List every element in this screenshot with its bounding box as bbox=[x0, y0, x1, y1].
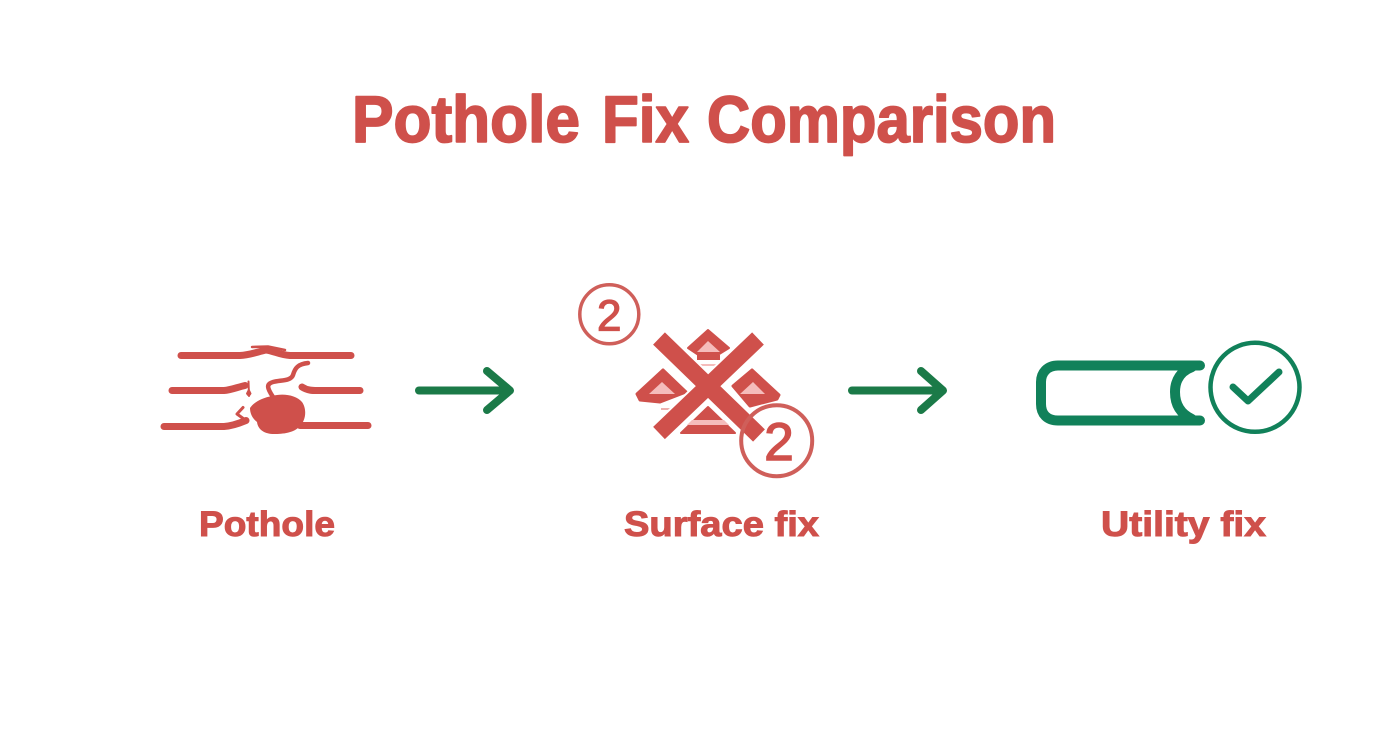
right diamond bbox=[733, 370, 779, 406]
badge: number 2 upper left bbox=[580, 285, 639, 344]
left diamond bbox=[637, 370, 686, 402]
title: Fix bbox=[602, 82, 689, 156]
arrow: surface fix to utility fix bbox=[852, 371, 943, 410]
label: utility fix: Utility fix bbox=[1101, 505, 1267, 544]
cross bbox=[659, 338, 759, 436]
top diamond bbox=[688, 330, 729, 356]
title bbox=[352, 82, 1056, 156]
badge: number 2 lower right: 2 bbox=[764, 413, 794, 472]
icon: pothole bbox=[164, 346, 368, 434]
cross outline bbox=[659, 338, 759, 436]
arrow: pothole to surface fix bbox=[419, 371, 510, 410]
badge: number 2 upper left: 2 bbox=[597, 292, 622, 340]
bottom triangle bbox=[681, 407, 735, 433]
icon: check mark circle bbox=[1210, 343, 1300, 432]
label: surface fix: Surface fix bbox=[624, 505, 820, 544]
title: Comparison bbox=[707, 82, 1056, 156]
title: Pothole bbox=[352, 82, 580, 156]
icon: surface fix crossed out bbox=[637, 330, 779, 436]
label: pothole: Pothole bbox=[199, 505, 335, 544]
badge: number 2 lower right bbox=[741, 405, 812, 476]
icon: utility pipe bbox=[1041, 366, 1200, 420]
